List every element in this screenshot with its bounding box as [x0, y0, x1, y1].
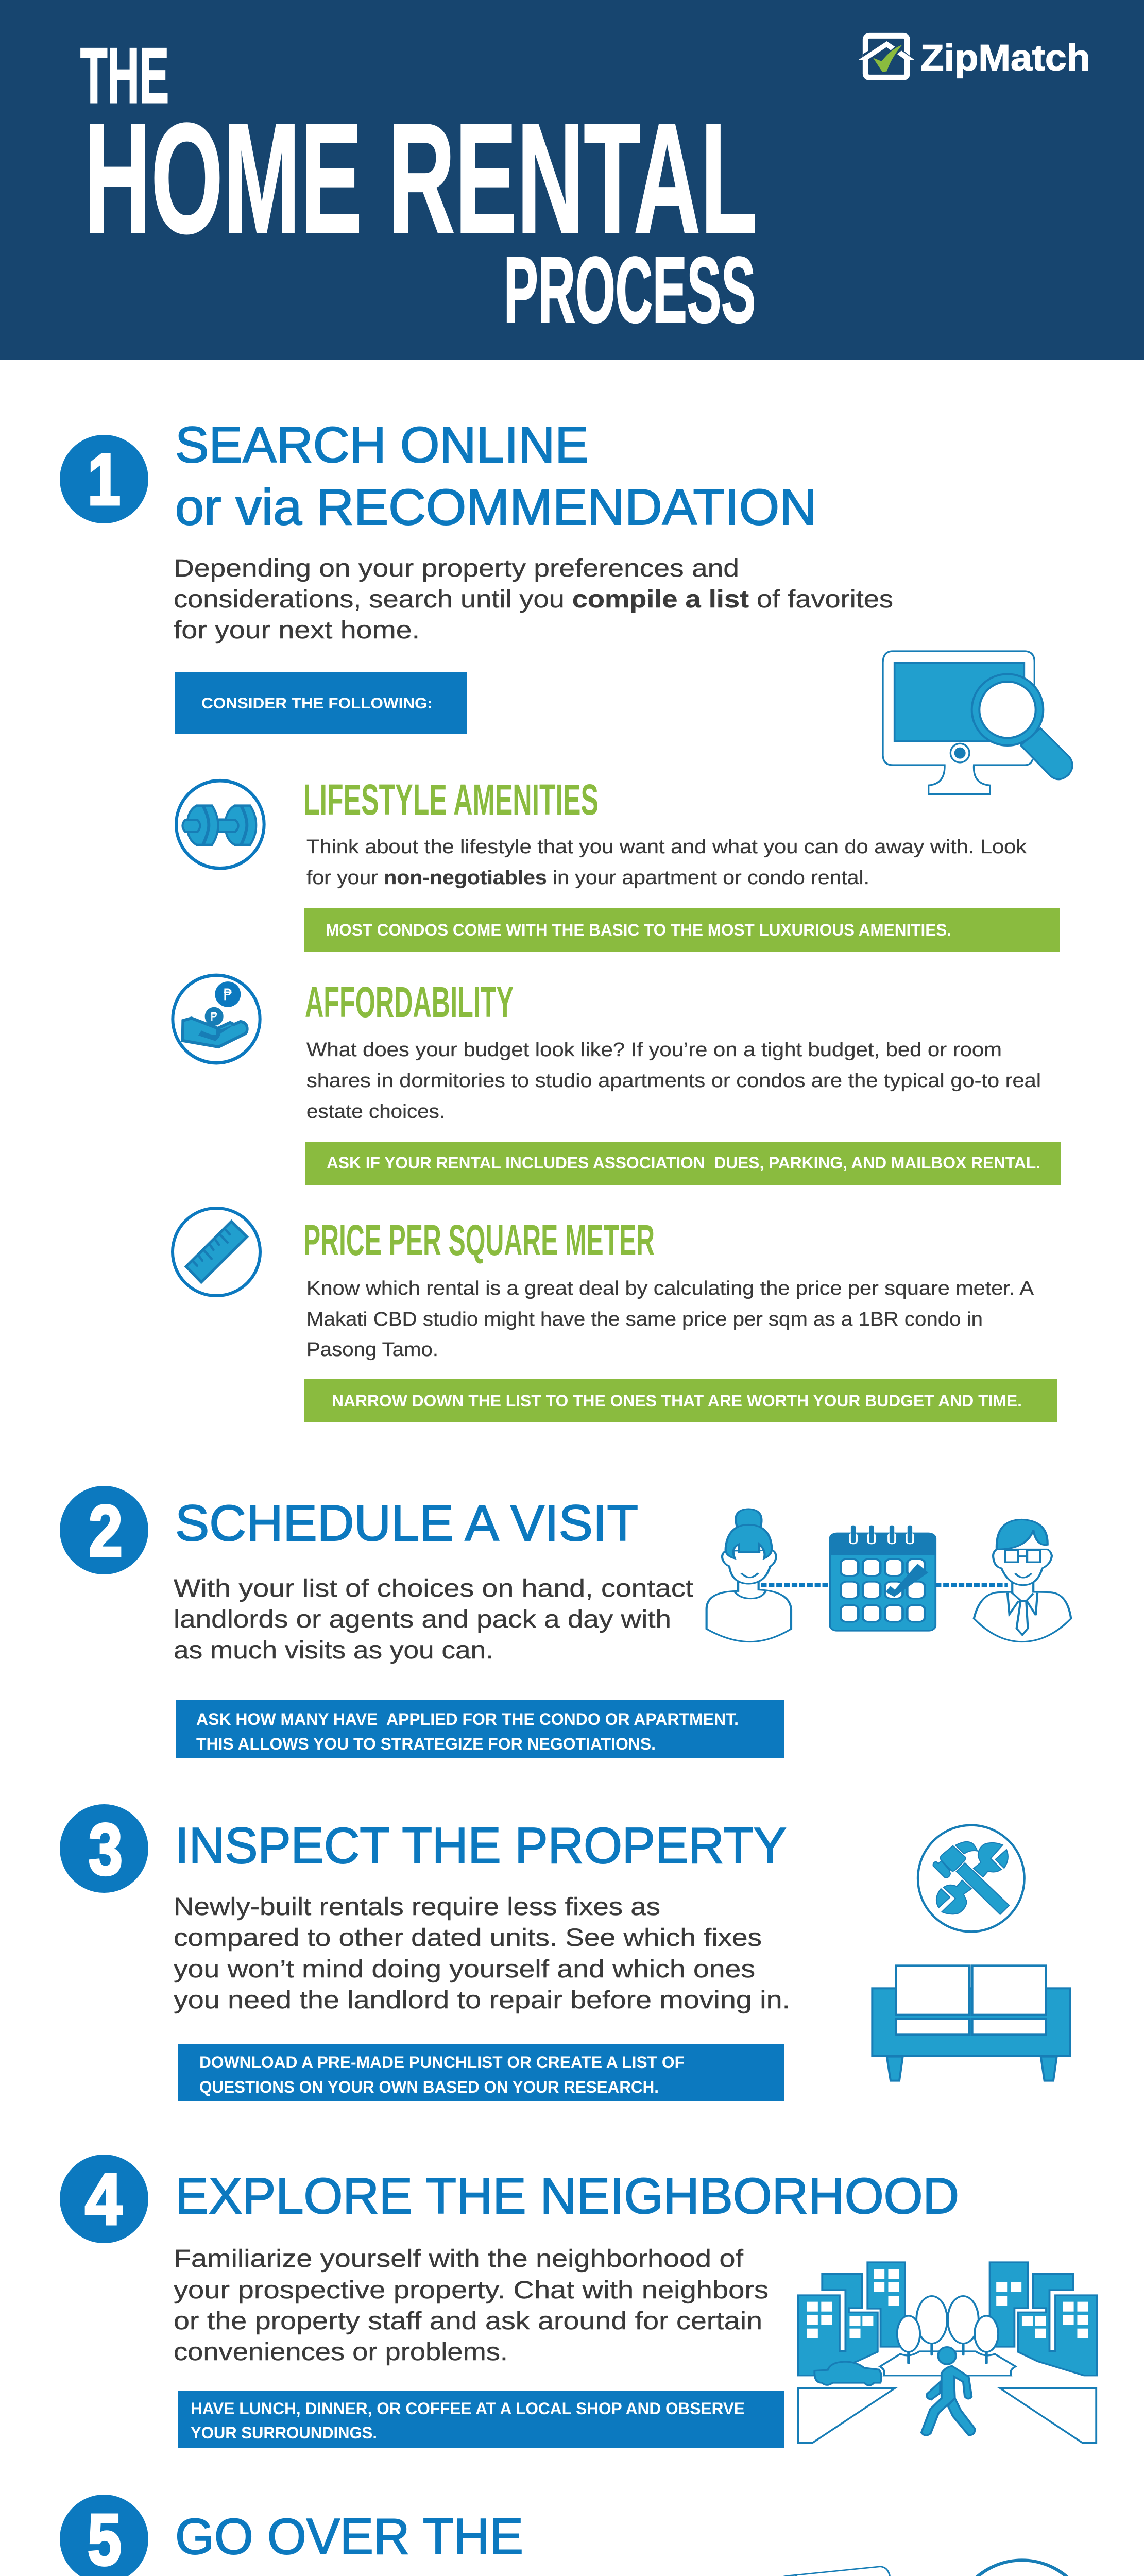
text: price — [306, 1278, 1034, 1361]
text: explore: conveniences or problems. — [174, 2338, 508, 2366]
text: schedule: as much visits as you can. — [174, 1637, 493, 1664]
text: schedule: With your list of choices on hand, contact — [174, 1575, 693, 1602]
callout: schedule: THIS ALLOWS YOU TO STRATEGIZE FOR NEGOTIATIONS. — [196, 1735, 656, 1753]
text: explore: or the property staff and ask around for certain — [174, 2308, 762, 2335]
text: inspect — [174, 1893, 790, 2014]
text: inspect: Newly-built rentals require less fixes as — [174, 1893, 660, 1921]
text: inspect: you need the landlord to repair before moving in. — [174, 1987, 790, 2014]
title — [80, 32, 757, 342]
callout: price — [304, 1379, 1057, 1422]
panel: step 4 explore the neighborhood — [60, 2155, 1097, 2448]
man — [974, 1519, 1071, 1642]
icon: tools — [918, 1825, 1025, 1931]
text: affordability: estate choices. — [306, 1101, 445, 1123]
step number 4: 4 — [85, 2158, 122, 2240]
heading: search online: SEARCH ONLINE — [175, 416, 589, 473]
text: schedule: landlords or agents and pack a day with — [174, 1606, 671, 1633]
text: price: Know which rental is a great deal by calculating the price per square meter. A — [306, 1278, 1034, 1299]
text: schedule — [174, 1575, 693, 1664]
intro text: for your next home. — [174, 617, 420, 644]
callout: explore: YOUR SURROUNDINGS. — [191, 2424, 377, 2442]
intro text: Depending on your property preferences and — [174, 555, 739, 582]
callout: schedule — [176, 1700, 784, 1758]
icon: hand with coins: ₱ — [210, 1009, 218, 1024]
text: explore: Familiarize yourself with the neighborhood of — [174, 2245, 744, 2273]
text: inspect: you won’t mind doing yourself and which ones — [174, 1956, 755, 1983]
heading: go over the lease agreement — [175, 2508, 665, 2576]
heading: price per square meter: PRICE PER SQUARE METER — [303, 1216, 655, 1264]
text: lifestyle: for your non-negotiables in your apartment or condo rental. — [306, 867, 869, 889]
heading: search online: or via RECOMMENDATION — [175, 479, 817, 535]
handshake — [953, 2560, 1091, 2576]
title: PROCESS — [504, 238, 756, 342]
panel: price per square meter — [173, 1208, 1057, 1422]
panel: step 3 inspect the property — [60, 1804, 1070, 2101]
heading: search online — [175, 416, 817, 535]
icon: monitor with magnifier — [883, 651, 1072, 794]
text: price: Pasong Tamo. — [306, 1339, 438, 1361]
text: affordability: What does your budget look like? If you’re on a tight budget, bed or room — [306, 1039, 1002, 1061]
title: THE — [80, 32, 169, 120]
text: affordability — [306, 1039, 1041, 1123]
connector dashes — [761, 1579, 1008, 1591]
panel: step 1 search online — [60, 416, 1072, 1422]
callout: affordability — [305, 1142, 1061, 1185]
callout: affordability: ASK IF YOUR RENTAL INCLUDES ASSOCIATION DUES, PARKING, AND MAILBOX RENTAL. — [327, 1154, 1040, 1172]
panel: step 5 go over the lease agreement — [60, 2495, 1091, 2576]
intro text: considerations, search until you compile a list of favorites — [174, 586, 893, 613]
step number 2: 2 — [89, 1490, 123, 1571]
text: lifestyle: Think about the lifestyle that you want and what you can do away with. Look — [306, 836, 1027, 858]
intro text — [174, 555, 893, 644]
callout: inspect: QUESTIONS ON YOUR OWN BASED ON YOUR RESEARCH. — [199, 2078, 659, 2096]
callout: schedule: ASK HOW MANY HAVE APPLIED FOR THE CONDO OR APARTMENT. — [196, 1710, 739, 1728]
woman — [707, 1509, 791, 1642]
step number 1: 1 — [88, 438, 121, 520]
icon: hand with coins: ₱ — [223, 986, 232, 1004]
text: affordability: shares in dormitories to studio apartments or condos are the typical go-to real — [306, 1070, 1041, 1092]
step number 5 — [60, 2495, 148, 2576]
panel: header banner — [0, 0, 1144, 360]
text: inspect: compared to other dated units. See which fixes — [174, 1924, 762, 1952]
step number 3 — [60, 1804, 148, 1893]
step number 3: 3 — [89, 1808, 123, 1890]
calendar — [830, 1526, 935, 1631]
panel: lifestyle amenities — [176, 775, 1060, 952]
icon: ruler — [173, 1208, 260, 1296]
heading: inspect the property: INSPECT THE PROPERTY — [175, 1817, 787, 1874]
text: explore — [174, 2245, 769, 2366]
logo: ZipMatch header: ZipMatch — [920, 38, 1090, 79]
panel: affordability — [173, 975, 1061, 1185]
heading: go over the lease agreement: GO OVER THE — [175, 2508, 523, 2565]
callout: amenities — [304, 908, 1060, 952]
callout: inspect: DOWNLOAD A PRE-MADE PUNCHLIST OR CREATE A LIST OF — [199, 2053, 685, 2072]
text: price: Makati CBD studio might have the same price per sqm as a 1BR condo in — [306, 1309, 983, 1330]
icon: dumbbell — [176, 781, 264, 868]
step number 1 — [60, 435, 148, 523]
icon: tenant, calendar and landlord — [707, 1509, 1071, 1642]
heading: affordability: AFFORDABILITY — [305, 978, 514, 1026]
icon: hand with coins — [173, 975, 260, 1063]
heading: lifestyle amenities: LIFESTYLE AMENITIES — [303, 775, 599, 824]
icon: neighborhood scene — [798, 2262, 1097, 2443]
callout: explore — [178, 2391, 784, 2448]
text: explore: your prospective property. Chat with neighbors — [174, 2277, 769, 2304]
step number 2 — [60, 1486, 148, 1574]
text: lifestyle — [306, 836, 1027, 889]
heading: explore the neighborhood: EXPLORE THE NEIGHBORHOOD — [175, 2167, 959, 2224]
callout: inspect — [178, 2044, 784, 2101]
logo: ZipMatch header — [858, 36, 1090, 79]
step number 4 — [60, 2155, 148, 2243]
callout: price: NARROW DOWN THE LIST TO THE ONES THAT ARE WORTH YOUR BUDGET AND TIME. — [332, 1392, 1022, 1410]
callout: consider the following — [175, 672, 467, 734]
callout: amenities: MOST CONDOS COME WITH THE BASIC TO THE MOST LUXURIOUS AMENITIES. — [326, 921, 951, 939]
panel: step 2 schedule a visit — [60, 1486, 1071, 1758]
heading: schedule a visit: SCHEDULE A VISIT — [175, 1495, 638, 1551]
icon: lease document and handshake — [779, 2560, 1091, 2576]
icon: couch — [872, 1966, 1070, 2081]
lease document — [779, 2567, 901, 2576]
callout: consider the following: CONSIDER THE FOLLOWING: — [201, 695, 433, 712]
callout: explore: HAVE LUNCH, DINNER, OR COFFEE AT A LOCAL SHOP AND OBSERVE — [191, 2399, 745, 2418]
